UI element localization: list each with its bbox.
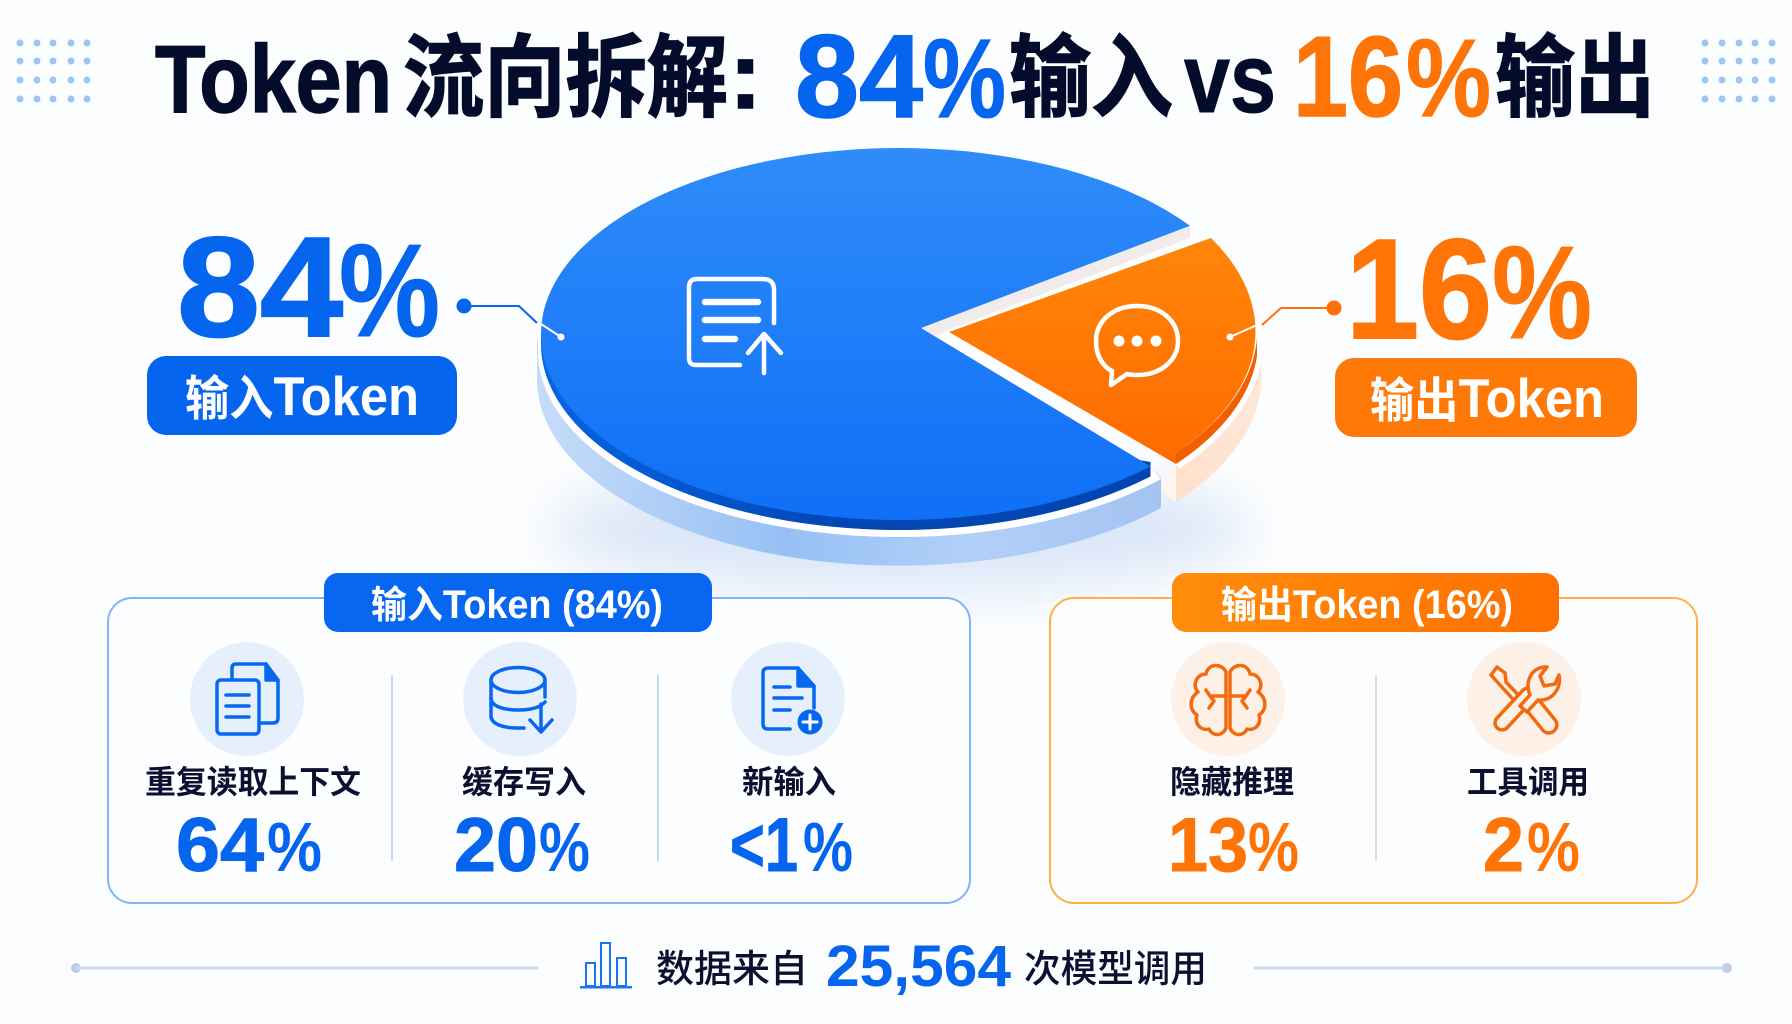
panel header: input: 输入Token (84%)	[371, 583, 663, 627]
footer	[71, 934, 1732, 999]
pill: input token	[147, 356, 457, 435]
orange slice top surface	[949, 238, 1255, 464]
icon: chat bubble	[1096, 306, 1178, 385]
title: 16	[1293, 14, 1403, 141]
icon: cache write database	[463, 642, 577, 756]
callout: 16% output: 输出Token	[1370, 367, 1604, 429]
label: hidden reasoning: 隐藏推理	[1170, 764, 1294, 800]
connector: input	[456, 298, 472, 314]
orange slice white rim	[1177, 352, 1259, 466]
title: Token	[155, 26, 392, 133]
value: 2%: 2	[1483, 803, 1524, 888]
icon: tools	[1467, 642, 1581, 756]
blue slice top surface	[541, 148, 1190, 520]
value: 64%: 64	[176, 803, 264, 888]
callout: 16% output	[1226, 210, 1637, 437]
icon: new input document	[731, 642, 845, 756]
panel header: output	[1172, 573, 1559, 632]
callout: 84% input: %	[339, 217, 440, 364]
footer rule: right	[1254, 963, 1732, 973]
callout: 84% input: 84	[177, 208, 343, 367]
title: 流向拆解	[403, 29, 728, 129]
label: repeated context: 重复读取上下文	[145, 764, 361, 800]
icon: brain	[1171, 642, 1285, 756]
slice gap wall	[921, 226, 1190, 336]
orange slice dark edge	[1176, 338, 1257, 464]
label: new input: 新输入	[742, 764, 836, 800]
pie chart shadow	[550, 468, 1250, 592]
decorative dots: left	[16, 40, 90, 102]
value: 64%	[176, 803, 322, 888]
panel header: input	[324, 573, 712, 632]
footer: 25,564	[826, 934, 1011, 999]
pill: output token	[1335, 358, 1637, 437]
connector: output	[1326, 300, 1342, 316]
callout: 84% input	[147, 208, 564, 435]
icon: document upload	[689, 279, 781, 373]
blue slice dark edge	[541, 334, 1150, 530]
decorative dots: right	[1702, 40, 1776, 102]
panel: output token breakdown	[1050, 573, 1697, 903]
value: 64%: %	[267, 808, 322, 886]
footer text: 数据来自	[656, 949, 808, 991]
callout: 16% output: 16	[1346, 210, 1492, 369]
white facet between slices	[1161, 466, 1176, 502]
panel header: output: 输出Token (16%)	[1221, 583, 1513, 627]
title: 84	[795, 11, 923, 143]
title	[155, 11, 1655, 143]
value: 20%	[454, 803, 590, 888]
value: less than 1%: <1	[730, 803, 798, 888]
label: tool calls: 工具调用	[1467, 764, 1589, 800]
value: 13%: %	[1248, 808, 1299, 886]
title: 输出	[1495, 29, 1655, 129]
value: 2%: %	[1527, 808, 1580, 886]
value: 20%: %	[539, 808, 590, 886]
icon: repeated context documents	[190, 642, 304, 756]
title: %	[1406, 17, 1491, 140]
value: 20%: 20	[454, 803, 538, 888]
blue slice side wall	[537, 340, 1161, 566]
orange slice side wall	[1176, 345, 1262, 502]
title: 输入	[1009, 29, 1173, 129]
value: less than 1%: %	[803, 808, 853, 886]
value: 13%: 13	[1168, 803, 1248, 888]
blue slice white rim	[538, 340, 1161, 537]
footer: 次模型调用	[1024, 949, 1207, 991]
value: 2%	[1483, 803, 1580, 888]
panel: input token breakdown	[108, 573, 970, 903]
3D pie chart: 84% vs 16%	[537, 148, 1262, 566]
title: vs	[1184, 23, 1276, 133]
footer rule: left	[71, 963, 538, 973]
callout: 84% input: 输入Token	[185, 365, 419, 427]
title: :	[729, 22, 762, 129]
callout: 16% output: %	[1492, 219, 1592, 366]
label: cache write: 缓存写入	[462, 764, 586, 800]
icon: bar chart	[580, 943, 632, 988]
value: 13%	[1168, 803, 1299, 888]
title: %	[923, 16, 1006, 141]
